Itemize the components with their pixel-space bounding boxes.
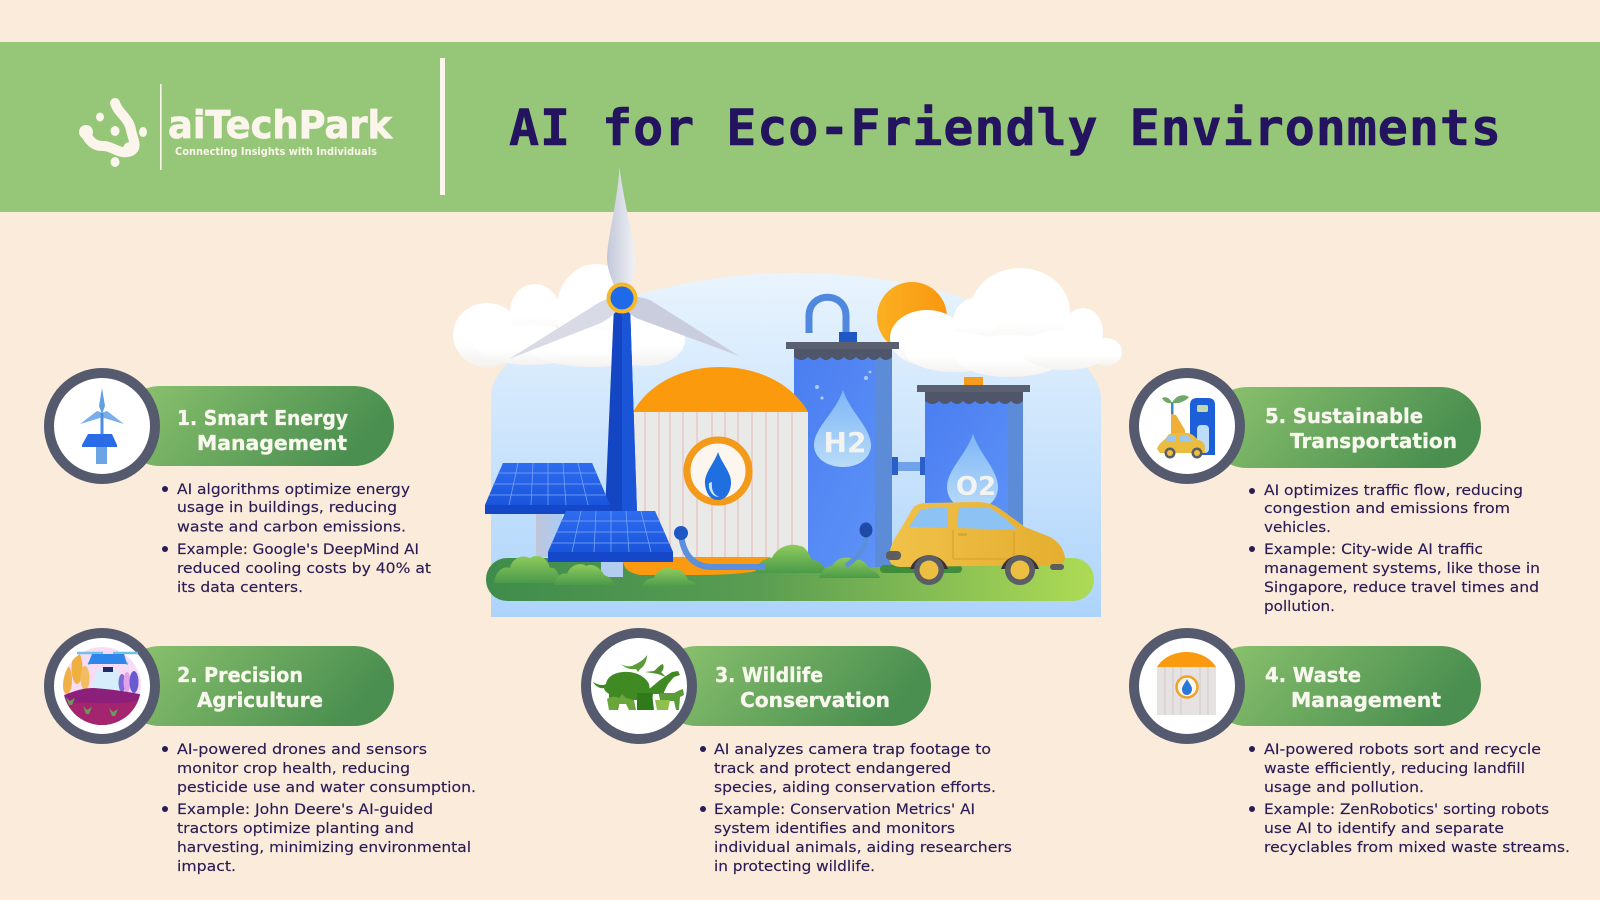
O2 tank (917, 377, 1030, 532)
logo (79, 84, 393, 170)
car wheels (910, 555, 1039, 585)
bullet list: AI analyzes camera trap footage to (714, 742, 991, 758)
O2 droplet (947, 434, 998, 510)
silo water badge (687, 440, 749, 502)
heading pill: Transportation (1290, 429, 1457, 453)
wind turbine (509, 167, 739, 512)
bullet list: harvesting, minimizing environmental (177, 840, 471, 856)
heading pill (120, 646, 394, 726)
title: AI for Eco-Friendly Environments (509, 99, 1501, 157)
H2 tank (786, 297, 899, 567)
heading pill: Conservation (740, 688, 890, 712)
bullet list: Example: Google's DeepMind AI (177, 542, 419, 558)
bullet list: usage and pollution. (1264, 780, 1424, 796)
bullet list: Example: John Deere's AI-guided (177, 802, 433, 818)
icon: wind turbine with solar panel (49, 373, 155, 479)
logo tagline: Connecting Insights with Individuals (175, 145, 377, 158)
bullet list: recyclables from mixed waste streams. (1264, 840, 1570, 856)
heading pill (657, 646, 931, 726)
bullet list (1249, 742, 1570, 856)
turbine base (601, 560, 623, 577)
H2 label: H2 (824, 426, 866, 459)
icon: logo mark (79, 103, 147, 167)
heading pill (120, 386, 394, 466)
O2 label: O2 (956, 472, 996, 502)
bullet list: impact. (177, 859, 236, 875)
bullet list: tractors optimize planting and (177, 821, 414, 837)
bullet list: Example: Conservation Metrics' AI (714, 802, 975, 818)
panel: 5 sustainable transportation (1134, 373, 1540, 615)
bullet list: reduced cooling costs by 40% at (177, 561, 431, 577)
icon: silo (1134, 633, 1240, 739)
heading pill: Agriculture (197, 688, 323, 712)
bullet list: AI algorithms optimize energy (177, 482, 410, 498)
bullet list: Example: ZenRobotics' sorting robots (1264, 802, 1549, 818)
bullet list: AI-powered drones and sensors (177, 742, 427, 758)
bullet list: monitor crop health, reducing (177, 761, 410, 777)
bullet list: in protecting wildlife. (714, 859, 875, 875)
heading pill: 1. Smart Energy (177, 406, 348, 430)
heading pill (1207, 646, 1481, 726)
bullet list: species, aiding conservation efforts. (714, 780, 996, 796)
bullet list: pollution. (1264, 599, 1335, 615)
heading pill: 3. Wildlife (715, 663, 823, 687)
bullet list: vehicles. (1264, 520, 1331, 536)
sky panel (491, 273, 1101, 617)
bullet list: track and protect endangered (714, 761, 951, 777)
right cloud (890, 268, 1122, 377)
bullet list (162, 482, 431, 596)
icon: drone over field (49, 633, 155, 739)
icon: wildlife silhouettes (586, 633, 692, 739)
bullet list: use AI to identify and separate (1264, 821, 1504, 837)
ground (486, 558, 1094, 601)
solar panel poles (536, 512, 562, 557)
panel: 3 wildlife conservation (586, 633, 1012, 875)
silo (633, 367, 808, 557)
bullet list (1249, 483, 1540, 615)
left cloud (453, 264, 685, 367)
bullet list: usage in buildings, reducing (177, 500, 397, 516)
icon: car at charging station (1134, 373, 1240, 479)
panel: 4 waste management (1134, 633, 1570, 856)
heading pill (1207, 387, 1481, 468)
bullet list: Singapore, reduce travel times and (1264, 580, 1539, 596)
logo wordmark: aiTechPark (168, 103, 393, 147)
heading pill: 2. Precision (177, 663, 303, 687)
heading pill: 4. Waste (1265, 663, 1361, 687)
bushes (494, 545, 880, 587)
heading pill: 5. Sustainable (1265, 404, 1423, 428)
bullet list: system identifies and monitors (714, 821, 955, 837)
bullet list: AI optimizes traffic flow, reducing (1264, 483, 1523, 499)
bullet list: waste efficiently, reducing landfill (1264, 761, 1525, 777)
bullet list (162, 742, 476, 875)
orange silo base (623, 555, 770, 575)
bullet list: pesticide use and water consumption. (177, 780, 476, 796)
bullet list: congestion and emissions from (1264, 501, 1510, 517)
bullet list (700, 742, 1012, 875)
right hose (846, 532, 866, 566)
bullet list: management systems, like those in (1264, 561, 1540, 577)
header banner (0, 42, 1600, 212)
bullet list: individual animals, aiding researchers (714, 840, 1012, 856)
panel: 2 precision agriculture (49, 633, 476, 875)
connector pipe (892, 457, 926, 475)
central illustration (453, 167, 1122, 617)
heading pill: Management (1291, 688, 1441, 712)
bullet list: AI-powered robots sort and recycle (1264, 742, 1541, 758)
bullet list: Example: City-wide AI traffic (1264, 542, 1483, 558)
panel: 1 smart energy (49, 373, 431, 596)
hose (681, 534, 765, 567)
sun (877, 282, 947, 352)
yellow car (880, 502, 1065, 585)
bullet list: waste and carbon emissions. (177, 520, 406, 536)
right nozzle (860, 522, 872, 538)
solar panel front (548, 511, 673, 562)
H2 droplet (814, 390, 871, 467)
hose nozzle (674, 526, 688, 540)
bullet list: its data centers. (177, 580, 303, 596)
heading pill: Management (197, 431, 347, 455)
solar panel back (485, 463, 610, 514)
